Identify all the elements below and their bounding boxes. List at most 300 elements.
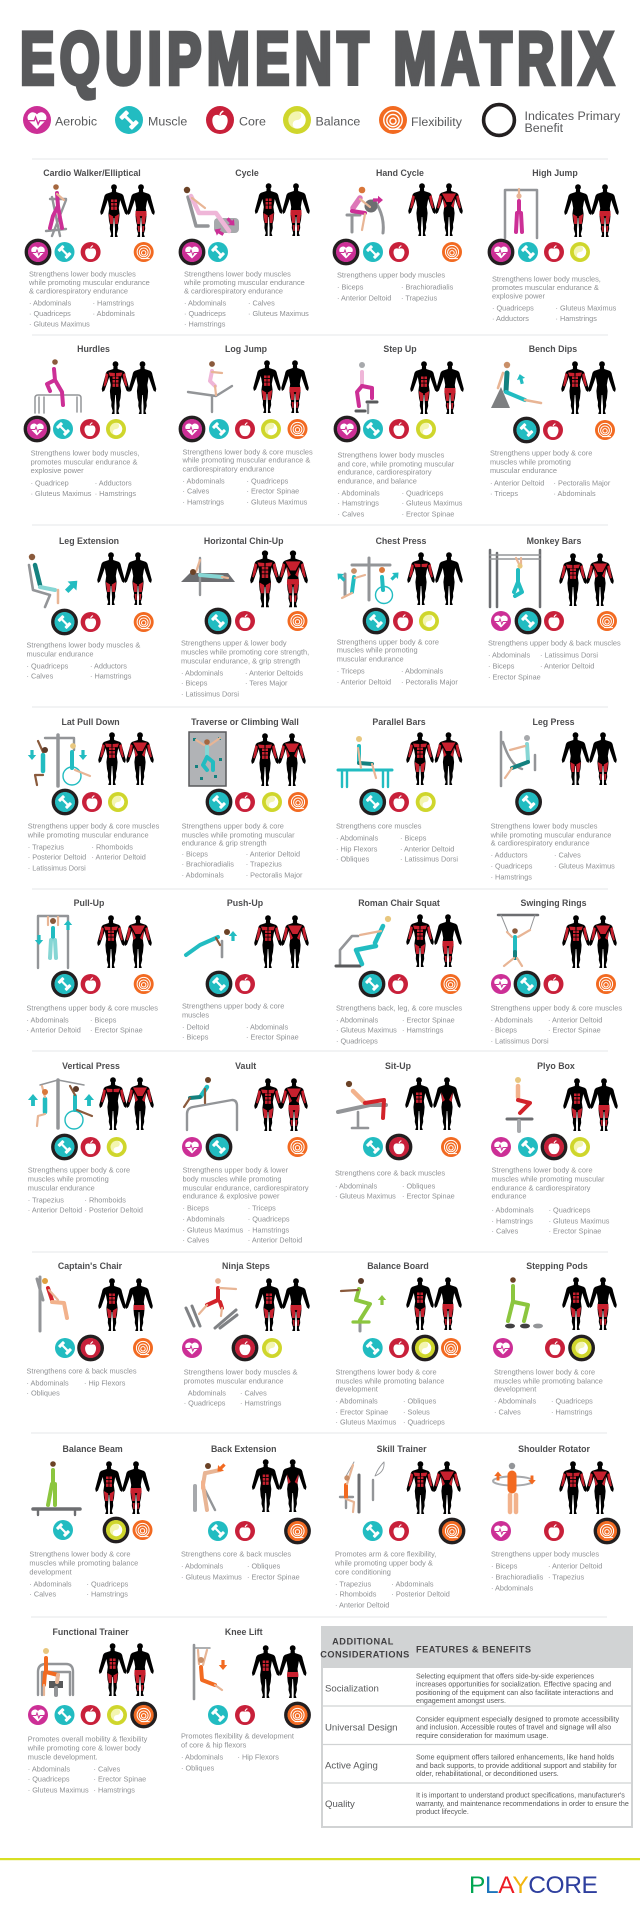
description: while promoting muscular endurance [490, 830, 611, 840]
muscle list: · Gluteus Maximus [336, 1026, 397, 1034]
illustration [184, 187, 239, 238]
description: muscular endurance [490, 466, 557, 475]
muscle list: · Gluteus Maximus [556, 304, 617, 312]
muscle list: · Erector Spinae [90, 1026, 143, 1034]
benefit icons [491, 972, 616, 996]
description: explosive power [492, 292, 546, 300]
card: Skill Trainer [334, 1444, 464, 1610]
muscle map [252, 1459, 307, 1512]
muscle map [559, 553, 614, 606]
description: and core, while promoting muscular [338, 460, 455, 468]
heading: Swinging Rings [521, 898, 587, 908]
muscle list: · Calves [182, 1236, 210, 1244]
legend: muscle [115, 106, 187, 134]
muscle list: · Abdominals [494, 1396, 537, 1406]
row: active aging: Some equipment offers tailored enhancements, like hand holds [416, 1754, 615, 1762]
muscle list: · Trapezius [401, 294, 437, 302]
muscle list: · Gluteus Maximus [336, 1418, 397, 1426]
description: muscular endurance, & grip strength [181, 656, 300, 666]
muscle list: · Biceps [90, 1016, 117, 1024]
muscle list: · Erector Spinae [402, 510, 454, 518]
muscle map [562, 915, 617, 968]
muscle map [100, 184, 155, 237]
table header: CONSIDERATIONS [320, 1650, 410, 1660]
description: muscles while promoting core strength, [181, 648, 309, 656]
illustration [181, 558, 235, 595]
legend: core [206, 106, 266, 134]
benefit icons [26, 240, 154, 264]
description: Strengthens upper body & core muscles [26, 1004, 158, 1012]
description: endurance & grip strength [182, 838, 267, 848]
muscle map [251, 733, 306, 786]
description: while promoting core & lower body [27, 1744, 141, 1752]
logo: PlayCore: PLAYCORE [469, 1872, 598, 1899]
illustration [498, 915, 538, 966]
description: core conditioning [335, 1568, 391, 1576]
muscle list: · Latissimus Dorsi [491, 1036, 549, 1046]
description: Strengthens upper body & core [28, 1166, 130, 1174]
card: Parallel Bars [336, 717, 462, 864]
benefit icons [182, 1336, 282, 1360]
muscle map [97, 552, 152, 605]
row: quality: It is important to understand product specifications, manufacturer's [416, 1792, 625, 1800]
muscle list: · Quadriceps [28, 1774, 70, 1784]
benefit icons [360, 972, 461, 996]
muscle list: · Pectoralis Major [246, 870, 303, 880]
muscle list: · Soleus [403, 1408, 430, 1416]
description: Promotes arm & core flexibility, [335, 1550, 436, 1558]
illustration [334, 558, 402, 604]
benefit icons [53, 790, 128, 814]
muscle list: · Gluteus Maximus [554, 862, 615, 870]
card: Step Up [335, 344, 464, 518]
card: Stepping Pods [493, 1261, 617, 1416]
benefit icons [363, 1336, 461, 1360]
illustration [33, 1461, 80, 1515]
description: Strengthens upper body muscles [337, 270, 445, 280]
legend [23, 105, 621, 135]
muscle list: · Biceps [182, 1032, 209, 1042]
heading: Captain's Chair [58, 1261, 123, 1271]
row: active aging: Active Aging [325, 1760, 378, 1772]
muscle list: · Calves [240, 1388, 267, 1398]
muscle list: · Hamstrings [556, 314, 597, 323]
muscle list: · Abdominals [401, 666, 444, 676]
muscle list: · Quadriceps [29, 309, 71, 318]
muscle map [410, 361, 464, 414]
muscle list: · Abdominals [492, 1206, 534, 1214]
heading: Roman Chair Squat [358, 898, 440, 908]
description: Strengthens lower body muscles [491, 822, 598, 830]
illustration [28, 735, 90, 786]
muscle list: · Latissimus Dorsi [400, 854, 458, 864]
illustration [189, 732, 226, 786]
card: Monkey Bars [488, 536, 621, 682]
card: Traverse or Climbing Wall [182, 717, 308, 880]
description: Strengthens lower body muscles [184, 270, 291, 278]
benefit icons [208, 1519, 309, 1543]
illustration [340, 1462, 384, 1512]
description: endurance & explosive power [182, 1192, 280, 1200]
benefit icons [53, 972, 154, 996]
muscle map [562, 732, 617, 785]
muscle list: · Abdominals [181, 1752, 224, 1762]
card: Leg Extension [26, 536, 154, 680]
description: muscular endurance, cardiorespiratory [182, 1184, 309, 1192]
legend: balance [283, 106, 360, 134]
muscle list: · Biceps [181, 678, 208, 688]
table header: FEATURES & BENEFITS [416, 1644, 532, 1654]
muscle map [407, 552, 463, 605]
heading: Balance Board [367, 1261, 429, 1271]
muscle map [559, 1461, 614, 1514]
description: promotes muscular endurance [184, 1376, 284, 1386]
muscle map [562, 1277, 617, 1330]
muscle list: · Adductors [95, 478, 132, 488]
muscle list: · Hamstrings [551, 1408, 593, 1416]
panel: additional considerations table [320, 1626, 633, 1827]
description: & cardiorespiratory endurance [491, 838, 590, 848]
muscle list: · Latissimus Dorsi [540, 650, 598, 660]
card: Shoulder Rotator [491, 1444, 619, 1592]
heading: Functional Trainer [52, 1627, 129, 1637]
title: EQUIPMENT MATRIX [20, 17, 619, 100]
muscle list: · Obliques [336, 854, 370, 864]
card: Ninja Steps [182, 1261, 310, 1408]
muscle map [561, 361, 616, 414]
benefit icons [491, 1135, 590, 1159]
muscle list: · Hamstrings [184, 320, 226, 328]
description: Strengthens upper body & lower [182, 1166, 289, 1174]
card: Push-Up [182, 898, 309, 1042]
benefit icons [53, 1135, 127, 1159]
muscle list: · Abdominals [29, 298, 72, 308]
row: universal design: Universal Design [325, 1722, 398, 1734]
muscle list: · Abdominals [26, 1016, 69, 1024]
muscle list: · Gluteus Maximus [182, 1226, 244, 1234]
illustration [188, 361, 232, 412]
card: Captain's Chair [26, 1261, 153, 1398]
muscle list: · Hamstrings [182, 498, 224, 506]
description: muscles while promoting balance [336, 1376, 444, 1386]
description: Strengthens back, leg, & core muscles [336, 1004, 462, 1012]
card: Balance Board [336, 1261, 462, 1426]
muscle list: · Hamstrings [94, 1786, 135, 1794]
heading: High Jump [532, 168, 578, 178]
description: muscular endurance [26, 650, 93, 658]
muscle list: · Biceps [488, 662, 515, 670]
muscle list: · Abdominals [181, 668, 224, 678]
heading: Leg Extension [59, 536, 119, 546]
muscle list: · Gluteus Maximus [248, 309, 309, 318]
muscle list: · Calves [94, 1764, 121, 1774]
row: active aging: older, rehabilitational, or deconditioned users. [416, 1770, 559, 1778]
benefit icons [53, 610, 154, 634]
description: endurance [492, 1192, 526, 1200]
benefit icons [335, 417, 436, 441]
description: development [494, 1384, 536, 1394]
description: promotes muscular endurance & [492, 283, 599, 292]
muscle list: · Posterior Deltoid [84, 1206, 143, 1214]
description: of core & hip flexors [181, 1740, 247, 1750]
muscle list: · Trapezius [28, 1196, 64, 1204]
description: development [29, 1568, 72, 1576]
muscle list: · Erector Spinae [94, 1774, 146, 1784]
muscle map [99, 1643, 154, 1696]
muscle list: · Hip Flexors [336, 844, 378, 854]
benefit icons [517, 790, 540, 814]
description: endurance, and balance [338, 476, 417, 486]
heading: Stepping Pods [526, 1261, 588, 1271]
card: Swinging Rings [491, 898, 622, 1046]
heading: Vertical Press [62, 1061, 120, 1071]
row: socialization: Selecting equipment that offers side-by-side experiences [416, 1672, 595, 1680]
card: Leg Press [490, 717, 617, 882]
card: Cardio Walker/Elliptical [26, 168, 155, 328]
heading: Pull-Up [74, 898, 105, 908]
card: Bench Dips [490, 344, 616, 498]
benefit icons [206, 609, 308, 633]
illustration [336, 916, 391, 966]
description: Promotes overall mobility & flexibility [28, 1734, 148, 1744]
muscle list: · Abdominals [181, 1562, 224, 1570]
muscle list: · Biceps [491, 1562, 518, 1570]
muscle list: · Pectoralis Major [554, 478, 611, 488]
benefit icons [515, 418, 615, 442]
description: Strengthens upper body muscles [491, 1550, 599, 1558]
muscle list: · Quadriceps [184, 309, 226, 318]
muscle list: · Quadriceps [248, 1214, 290, 1224]
muscle list: · Quadriceps [492, 304, 534, 312]
card: Chest Press [334, 536, 463, 686]
muscle map [252, 1645, 307, 1698]
muscle list: · Anterior Deltoid [92, 852, 146, 862]
legend: aerobic: Aerobic [55, 114, 97, 128]
muscle list: · Latissimus Dorsi [28, 864, 86, 872]
muscle map [564, 184, 619, 237]
muscle list: · Gluteus Maximus [549, 1216, 610, 1226]
muscle list: · Anterior Deltoid [548, 1016, 602, 1024]
description: muscles while promoting muscular [492, 1174, 605, 1184]
muscle list: · Anterior Deltoid [248, 1236, 302, 1244]
muscle list: · Quadriceps [336, 1036, 378, 1046]
muscle map [253, 360, 309, 413]
row: universal design: require consideration for maximum usage. [416, 1732, 549, 1740]
muscle list: · Hip Flexors [238, 1752, 279, 1762]
illustration [493, 1463, 536, 1512]
description: development [336, 1384, 378, 1394]
card: Cycle [180, 168, 310, 328]
description: Strengthens core & back muscles [335, 1168, 445, 1178]
muscle list: · Abdominals [182, 476, 225, 486]
muscle list: · Posterior Deltoid [391, 1590, 450, 1598]
muscle list: · Anterior Deltoid [335, 1600, 389, 1610]
benefit icons [363, 1519, 464, 1543]
muscle list: · Posterior Deltoid [28, 852, 86, 862]
heading: Lat Pull Down [62, 717, 120, 727]
muscle list: · Gluteus Maximus [28, 1786, 89, 1794]
muscle list: · Gluteus Maximus [246, 498, 308, 506]
card: Hurdles [25, 344, 156, 498]
card: Horizontal Chin-Up [181, 536, 309, 698]
muscle list: · Gluteus Maximus [31, 489, 92, 498]
card: Sit-Up [335, 1061, 461, 1200]
description: Strengthens upper & lower body [181, 638, 287, 648]
muscle list: · Obliques [181, 1764, 215, 1772]
benefit icons [182, 1135, 308, 1159]
muscle list: · Abdominals [488, 650, 531, 660]
muscle map [405, 1077, 461, 1130]
description: cardiorespiratory endurance [182, 464, 275, 474]
muscle list: · Abdominals [554, 489, 596, 498]
muscle list: · Latissimus Dorsi [181, 690, 239, 698]
description: & cardiorespiratory endurance [29, 286, 128, 296]
muscle list: · Erector Spinae [246, 1032, 299, 1042]
description: Strengthens lower body muscles [29, 270, 136, 278]
table header [320, 1626, 633, 1668]
muscle list: · Hamstrings [338, 498, 379, 508]
muscle list: · Deltoid [182, 1022, 209, 1032]
muscle list: · Adductors [492, 314, 529, 323]
description: & cardiorespiratory endurance [184, 286, 283, 296]
description: muscles while promoting [490, 458, 571, 466]
muscle list: · Anterior Deltoid [28, 1206, 82, 1214]
muscle map [406, 1277, 462, 1330]
illustration [491, 362, 541, 408]
illustration [501, 732, 535, 786]
muscle list: · Quadriceps [551, 1396, 593, 1406]
heading: Cardio Walker/Elliptical [43, 168, 141, 178]
muscle list: Abdominals [188, 1388, 226, 1398]
description: Strengthens upper body & back muscles [488, 638, 621, 648]
muscle list: · Quadriceps [549, 1206, 591, 1214]
illustration [341, 1278, 386, 1331]
heading: Vault [235, 1061, 256, 1071]
card: Plyo Box [491, 1061, 618, 1236]
benefit icons [334, 240, 462, 264]
muscle list: · Anterior Deltoid [400, 844, 454, 854]
description: Strengthens upper body & core [182, 822, 284, 830]
muscle list: · Abdominals [335, 1182, 378, 1190]
muscle list: · Obliques [247, 1562, 281, 1570]
legend: flexibility: Flexibility [411, 115, 463, 129]
table header: ADDITIONAL [332, 1636, 394, 1646]
description: muscles while promoting [28, 1174, 109, 1184]
description: Strengthens core muscles [336, 822, 422, 830]
heading: Balance Beam [63, 1444, 123, 1454]
muscle list: · Obliques [26, 1388, 60, 1398]
benefit icons [493, 1336, 593, 1360]
heading: Parallel Bars [372, 717, 426, 727]
heading: Leg Press [532, 717, 575, 727]
muscle list: · Rhomboids [335, 1590, 377, 1598]
muscle list: · Quadriceps [26, 662, 69, 670]
muscle map [98, 1278, 153, 1331]
heading: Back Extension [211, 1444, 276, 1454]
row: quality [325, 1792, 629, 1816]
muscle map [99, 1077, 154, 1130]
description: muscles while promoting [337, 646, 418, 654]
description: Strengthens lower body muscles, [492, 274, 601, 284]
muscle list: · Obliques [403, 1396, 437, 1406]
muscle list: · Adductors [491, 850, 528, 860]
description: Strengthens upper body & core [182, 1002, 284, 1010]
muscle list: · Anterior Deltoid [246, 850, 300, 858]
row: socialization [325, 1672, 613, 1705]
illustration [186, 929, 237, 957]
muscle map [406, 914, 462, 967]
muscle list: · Triceps [337, 666, 365, 676]
muscle list: · Abdominals [28, 1764, 70, 1774]
muscle map [97, 915, 152, 968]
benefit icons [53, 1518, 152, 1542]
muscle list: · Hamstrings [93, 298, 134, 308]
muscle map [254, 1078, 308, 1131]
card: High Jump [489, 168, 619, 323]
muscle list: · Gluteus Maximus [402, 498, 463, 508]
legend: flexibility [379, 106, 463, 134]
row: socialization: Socialization [325, 1684, 379, 1694]
description: Strengthens lower body & core [494, 1368, 595, 1376]
muscle list: · Abdominals [491, 1584, 534, 1592]
muscle list: · Triceps [248, 1204, 276, 1212]
muscle list: · Abdominals [338, 488, 380, 498]
muscle map [98, 732, 154, 785]
muscle list: · Biceps [182, 1204, 209, 1212]
illustration [195, 1461, 228, 1510]
muscle list: · Rhomboids [92, 842, 133, 852]
illustration [347, 187, 383, 233]
description: while promoting muscular endurance [28, 278, 150, 287]
benefit icons [491, 609, 617, 633]
muscle list: · Abdominals [336, 834, 379, 842]
illustration [184, 1077, 237, 1130]
heading: Horizontal Chin-Up [204, 536, 284, 546]
legend: aerobic [23, 106, 97, 134]
description: muscle development. [28, 1752, 98, 1762]
benefit icons [180, 417, 308, 441]
benefit icons [28, 1703, 155, 1727]
muscle list: · Brachioradialis [401, 282, 454, 292]
description: Strengthens core & back muscles [181, 1550, 291, 1558]
muscle list: · Anterior Deltoid [540, 662, 594, 670]
description: Strengthens upper body & core [337, 638, 439, 646]
card: Vault [182, 1061, 309, 1244]
muscle list: · Abdominals [182, 1214, 225, 1224]
legend: primary benefit: Benefit [524, 121, 564, 135]
description: Strengthens upper body & core [490, 448, 592, 458]
muscle list: · Trapezius [335, 1580, 371, 1588]
muscle list: · Quadriceps [402, 488, 444, 498]
description: Strengthens upper body & core muscles [28, 822, 160, 830]
illustration [490, 550, 540, 607]
muscle list: · Pectoralis Major [401, 678, 458, 686]
muscle list: · Abdominals [336, 1396, 378, 1406]
muscle list: · Erector Spinae [548, 1026, 601, 1034]
description: body muscles while promoting [182, 1174, 282, 1184]
card: Functional Trainer [27, 1627, 155, 1794]
muscle list: · Trapezius [28, 842, 64, 852]
muscle list: · Rhomboids [84, 1196, 126, 1204]
muscle list: · Hamstrings [90, 672, 132, 680]
description: Strengthens lower body muscles, [31, 448, 139, 458]
description: while promoting upper body & [334, 1558, 433, 1568]
illustration [46, 184, 66, 236]
legend: primary benefit [484, 105, 621, 135]
muscle list: · Hamstrings [402, 1026, 444, 1034]
muscle list: · Quadriceps [246, 476, 289, 486]
heading: Push-Up [227, 898, 264, 908]
